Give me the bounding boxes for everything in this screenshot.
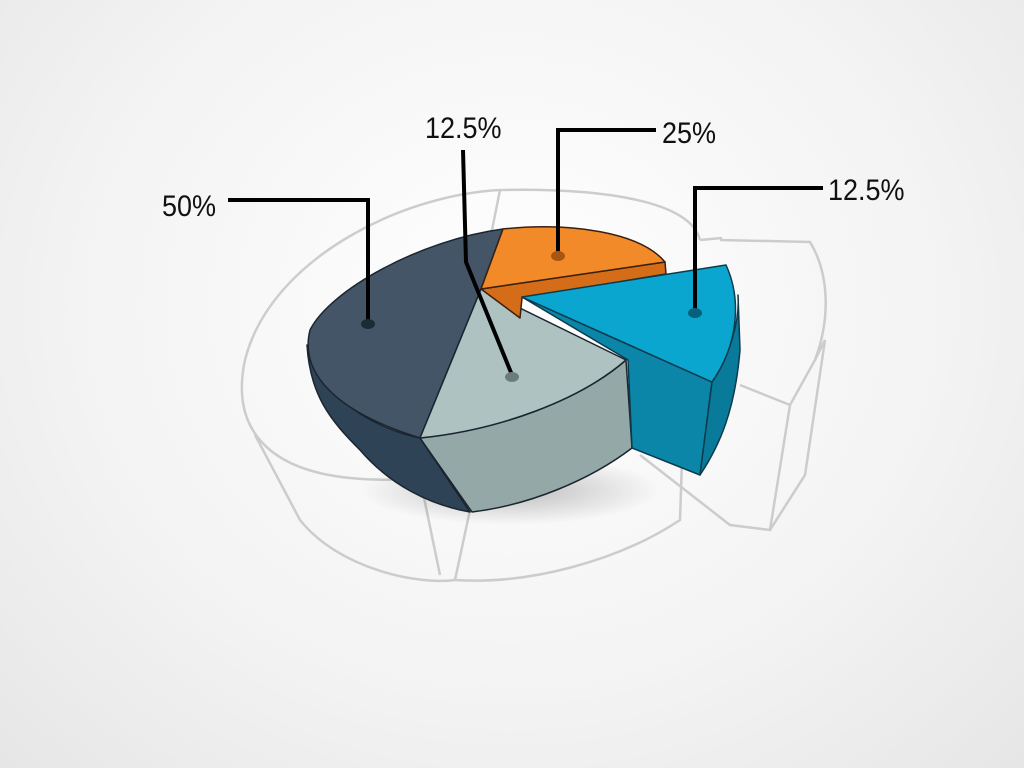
callout: 50%: 50% [162, 190, 216, 223]
callout: 12.5% blue [688, 174, 904, 318]
shadow [360, 455, 660, 525]
slice: dark 50% [307, 229, 503, 512]
callout: 50% [162, 190, 375, 329]
callout: 12.5% blue: 12.5% [828, 174, 904, 207]
callout: 25%: 25% [662, 117, 716, 150]
slice: blue 12.5% [522, 265, 740, 475]
callout: 12.5% light [425, 112, 519, 382]
slice: light 12.5% [420, 289, 632, 512]
slice: orange 25% [481, 227, 666, 318]
callout: 12.5% light: 12.5% [425, 112, 501, 145]
callout: 25% [551, 117, 716, 261]
ghost outline pie [242, 190, 826, 581]
